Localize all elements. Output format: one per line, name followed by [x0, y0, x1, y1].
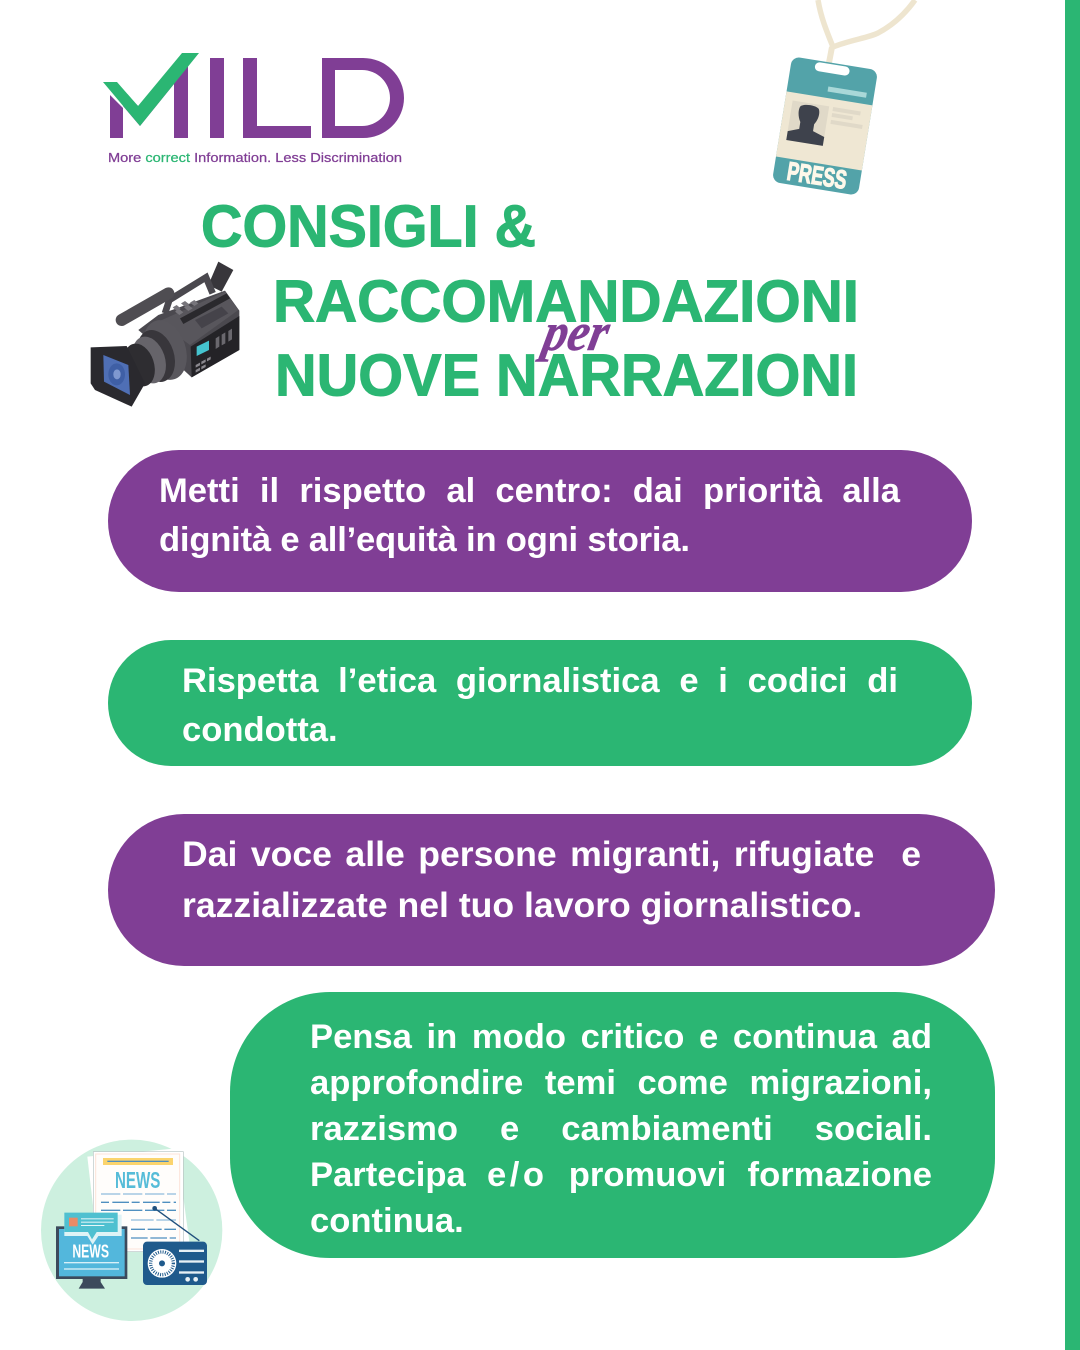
logo letters: [110, 58, 404, 138]
logo check mark: [103, 53, 199, 126]
text: etica: [182, 662, 898, 749]
title: CONSIGLI &: [201, 194, 536, 260]
panel: pensa: [230, 992, 995, 1258]
title: [201, 194, 859, 408]
icon: news media: NEWS: [72, 1240, 109, 1261]
text: dai voce: [182, 834, 921, 925]
icon: video camera: [90, 262, 240, 407]
text: rispetto: dignità e all’equità in ogni storia.: [159, 521, 690, 559]
icon: press badge: [773, 0, 918, 195]
icon: news media: [41, 1140, 222, 1321]
title: NUOVE NARRAZIONI: [275, 342, 858, 408]
text: etica: Rispetta l’etica giornalistica e i codici di: [182, 662, 898, 700]
text: etica: condotta.: [182, 711, 338, 749]
text: pensa: approfondire temi come migrazioni,: [310, 1064, 932, 1102]
text: dai voce: razzializzate nel tuo lavoro giornalistico.: [182, 885, 862, 925]
title: RACCOMANDAZIONI: [273, 268, 859, 334]
icon: press badge: PRESS: [785, 156, 849, 195]
icon: news media: NEWS: [115, 1167, 160, 1193]
text: pensa: razzismo e cambiamenti sociali.: [310, 1110, 932, 1148]
panel: rispetto: [108, 450, 972, 592]
panel: dai voce: [108, 814, 995, 966]
text: pensa: continua.: [310, 1202, 464, 1240]
text: pensa: [310, 1018, 932, 1240]
right green stripe: [1065, 0, 1080, 1350]
title word: per: per: [535, 302, 616, 362]
logo tagline: More correct Information. Less Discrimination: [108, 150, 402, 165]
text: rispetto: [159, 472, 900, 559]
text: rispetto: Metti il rispetto al centro: dai priorità alla: [159, 472, 900, 510]
text: pensa: Partecipa e/o promuovi formazione: [310, 1156, 932, 1194]
text: dai voce: Dai voce alle persone migranti, rifugiate e: [182, 834, 921, 874]
panel: etica: [108, 640, 972, 766]
logo: MILD: [103, 53, 404, 165]
text: pensa: Pensa in modo critico e continua ad: [310, 1018, 932, 1056]
